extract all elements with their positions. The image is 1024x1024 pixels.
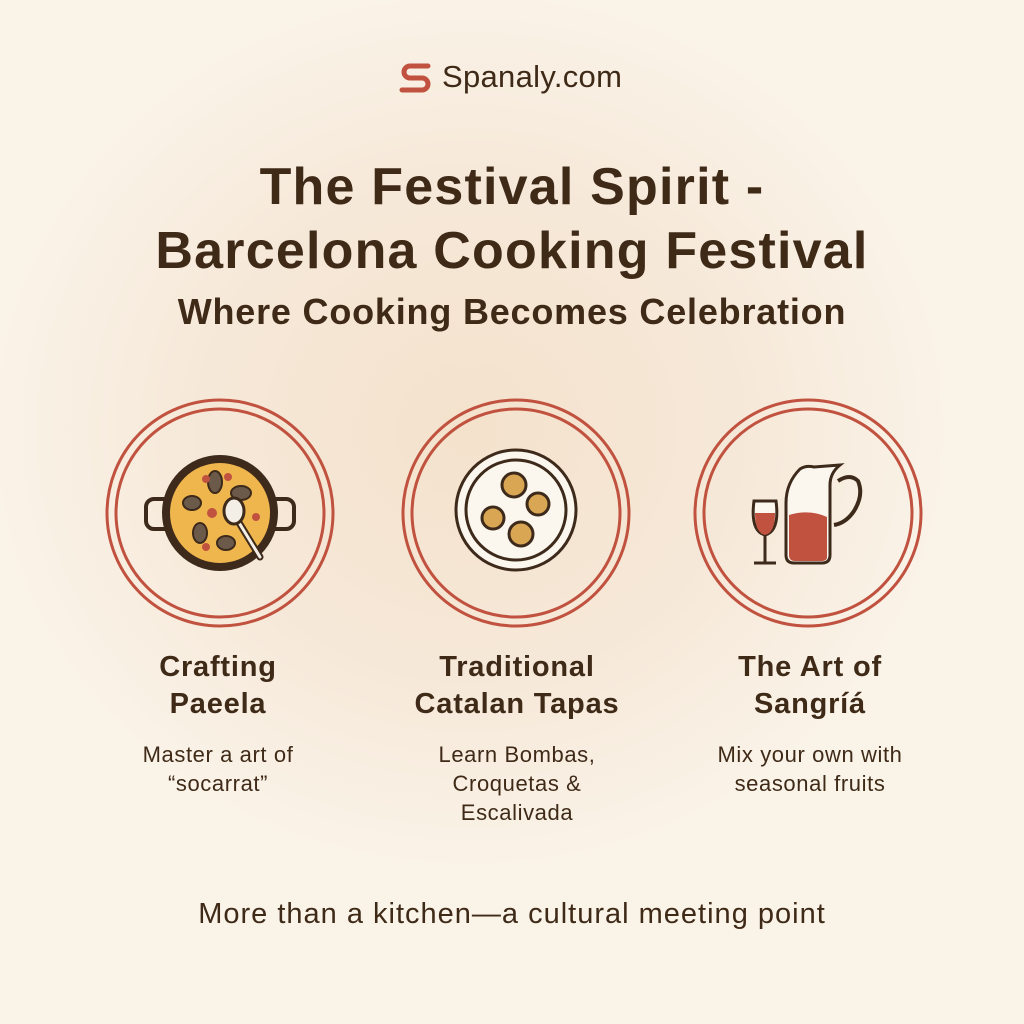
card: sangria: The Art of bbox=[738, 651, 882, 683]
title: Barcelona Cooking Festival bbox=[155, 222, 869, 280]
subtitle: Where Cooking Becomes Celebration bbox=[178, 291, 846, 332]
icon: tapas circle bbox=[402, 398, 630, 628]
card: tapas: Traditional bbox=[439, 651, 595, 683]
title: The Festival Spirit - bbox=[260, 158, 764, 216]
card: sangria bbox=[717, 651, 903, 796]
card: paella: Master a art of bbox=[143, 742, 293, 767]
title bbox=[155, 158, 869, 280]
card: tapas: Croquetas & bbox=[453, 771, 581, 796]
card: paella: Crafting bbox=[159, 651, 277, 683]
icon: paella circle bbox=[106, 398, 334, 628]
logo: Spanaly.com bbox=[442, 59, 622, 94]
icon: logo S bbox=[400, 64, 430, 92]
card: tapas: Learn Bombas, bbox=[438, 742, 596, 767]
card: sangria: Sangríá bbox=[754, 688, 866, 720]
card: paella bbox=[143, 651, 293, 796]
icon: sangria circle bbox=[694, 398, 922, 628]
card: tapas bbox=[415, 651, 619, 825]
card: tapas: Catalan Tapas bbox=[415, 688, 619, 720]
card: tapas: Escalivada bbox=[461, 800, 573, 825]
card: paella: Paeela bbox=[170, 688, 266, 720]
footer: More than a kitchen—a cultural meeting point bbox=[198, 898, 826, 930]
card: sangria: Mix your own with bbox=[717, 742, 903, 767]
card: sangria: seasonal fruits bbox=[735, 771, 885, 796]
card: paella: “socarrat” bbox=[168, 771, 268, 796]
